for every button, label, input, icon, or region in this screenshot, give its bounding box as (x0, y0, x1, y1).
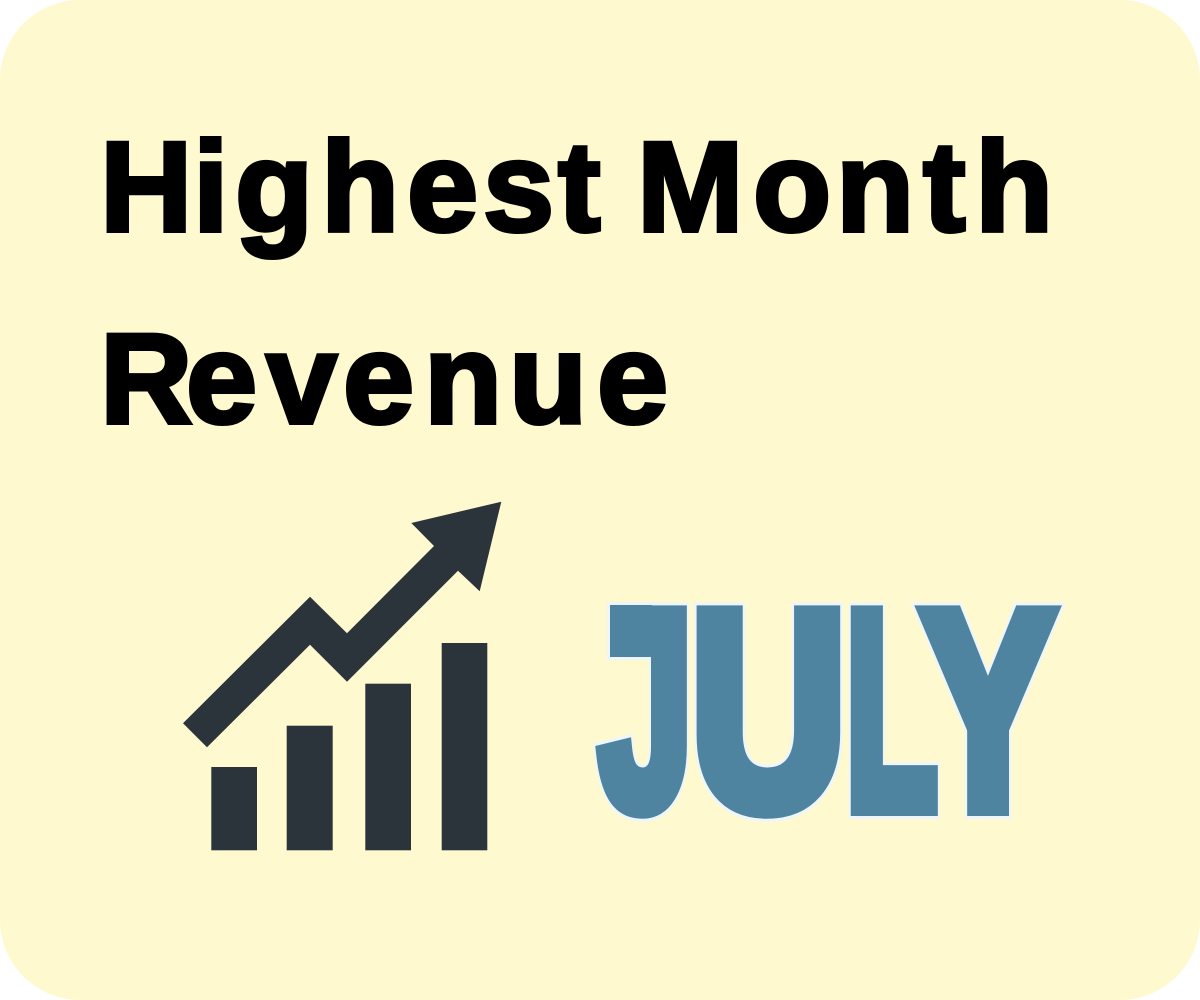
JULY outline: Y (923, 556, 1053, 865)
JULY fill: J (600, 556, 692, 865)
bar 3 (365, 684, 411, 850)
JULY fill: U (691, 556, 846, 865)
JULY fill (600, 556, 1053, 866)
JULY outline: J (600, 556, 692, 865)
bar 4 (442, 643, 487, 850)
JULY fill: Y (923, 556, 1053, 865)
bar 2 (287, 726, 333, 850)
JULY outline (600, 556, 1053, 866)
title: Highest Month Revenue (100, 116, 1053, 451)
month label: JULY (600, 556, 1053, 866)
icon: rising bar chart with arrow (183, 502, 501, 850)
title line 2: Revenue (100, 308, 668, 451)
icon: rising arrow (183, 502, 501, 747)
title line 1: Highest Month (100, 116, 1053, 259)
JULY fill: L (846, 557, 937, 866)
bar 1 (211, 767, 257, 850)
JULY outline: L (846, 557, 937, 866)
JULY outline: U (691, 556, 846, 865)
